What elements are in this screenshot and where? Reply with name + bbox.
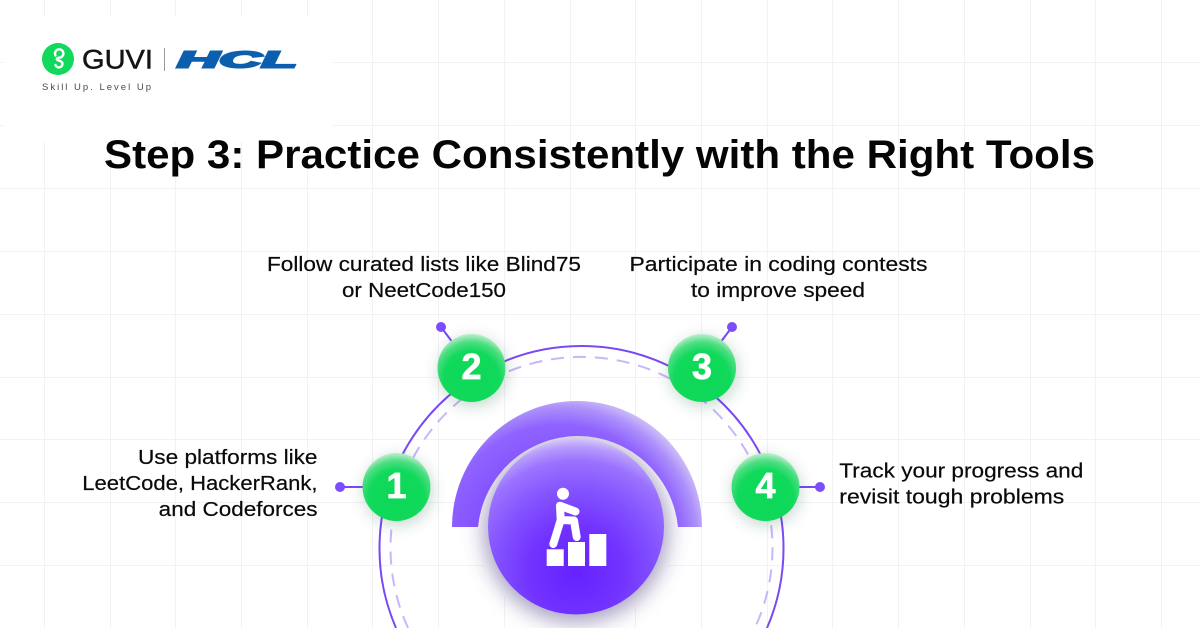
text: step 4	[839, 460, 1083, 508]
dashed inner ring	[390, 357, 772, 628]
text: step 2: Follow curated lists like Blind75	[267, 254, 581, 276]
step 3 marker: 3	[692, 346, 712, 387]
icon: person climbing steps	[547, 488, 606, 566]
HCL wordmark: HCL	[177, 46, 297, 72]
tagline: Skill Up. Level Up	[42, 82, 151, 93]
title: Step 3: Practice Consistently with the Right Tools	[104, 133, 1095, 177]
text: step 2	[267, 254, 581, 302]
half ring arc	[452, 401, 702, 527]
GUVI wordmark: GUVI	[82, 44, 153, 74]
text: step 4: revisit tough problems	[839, 486, 1064, 508]
step 1 marker: 1	[386, 465, 407, 506]
step 4 marker: 4	[755, 465, 776, 506]
text: step 3: to improve speed	[691, 280, 865, 302]
step 2 marker: 2	[461, 346, 482, 387]
text: step 2: or NeetCode150	[342, 280, 506, 302]
outer ring	[380, 346, 784, 628]
text: step 1: Use platforms like	[138, 447, 318, 469]
step 3 marker	[668, 322, 738, 406]
icon: GUVI green badge	[42, 43, 74, 75]
text: step 3: Participate in coding contests	[630, 254, 928, 276]
text: step 4: Track your progress and	[839, 460, 1083, 482]
step 2 marker	[436, 322, 507, 406]
text: step 1: LeetCode, HackerRank,	[82, 473, 318, 495]
central circle	[488, 438, 664, 614]
step 4 marker	[732, 453, 825, 525]
logo: GUVI HCL	[42, 43, 297, 93]
step 1 marker	[335, 453, 432, 525]
central glow	[484, 438, 668, 622]
text: step 1	[82, 447, 318, 521]
text: step 3	[630, 254, 928, 302]
text: step 1: and Codeforces	[159, 499, 318, 521]
